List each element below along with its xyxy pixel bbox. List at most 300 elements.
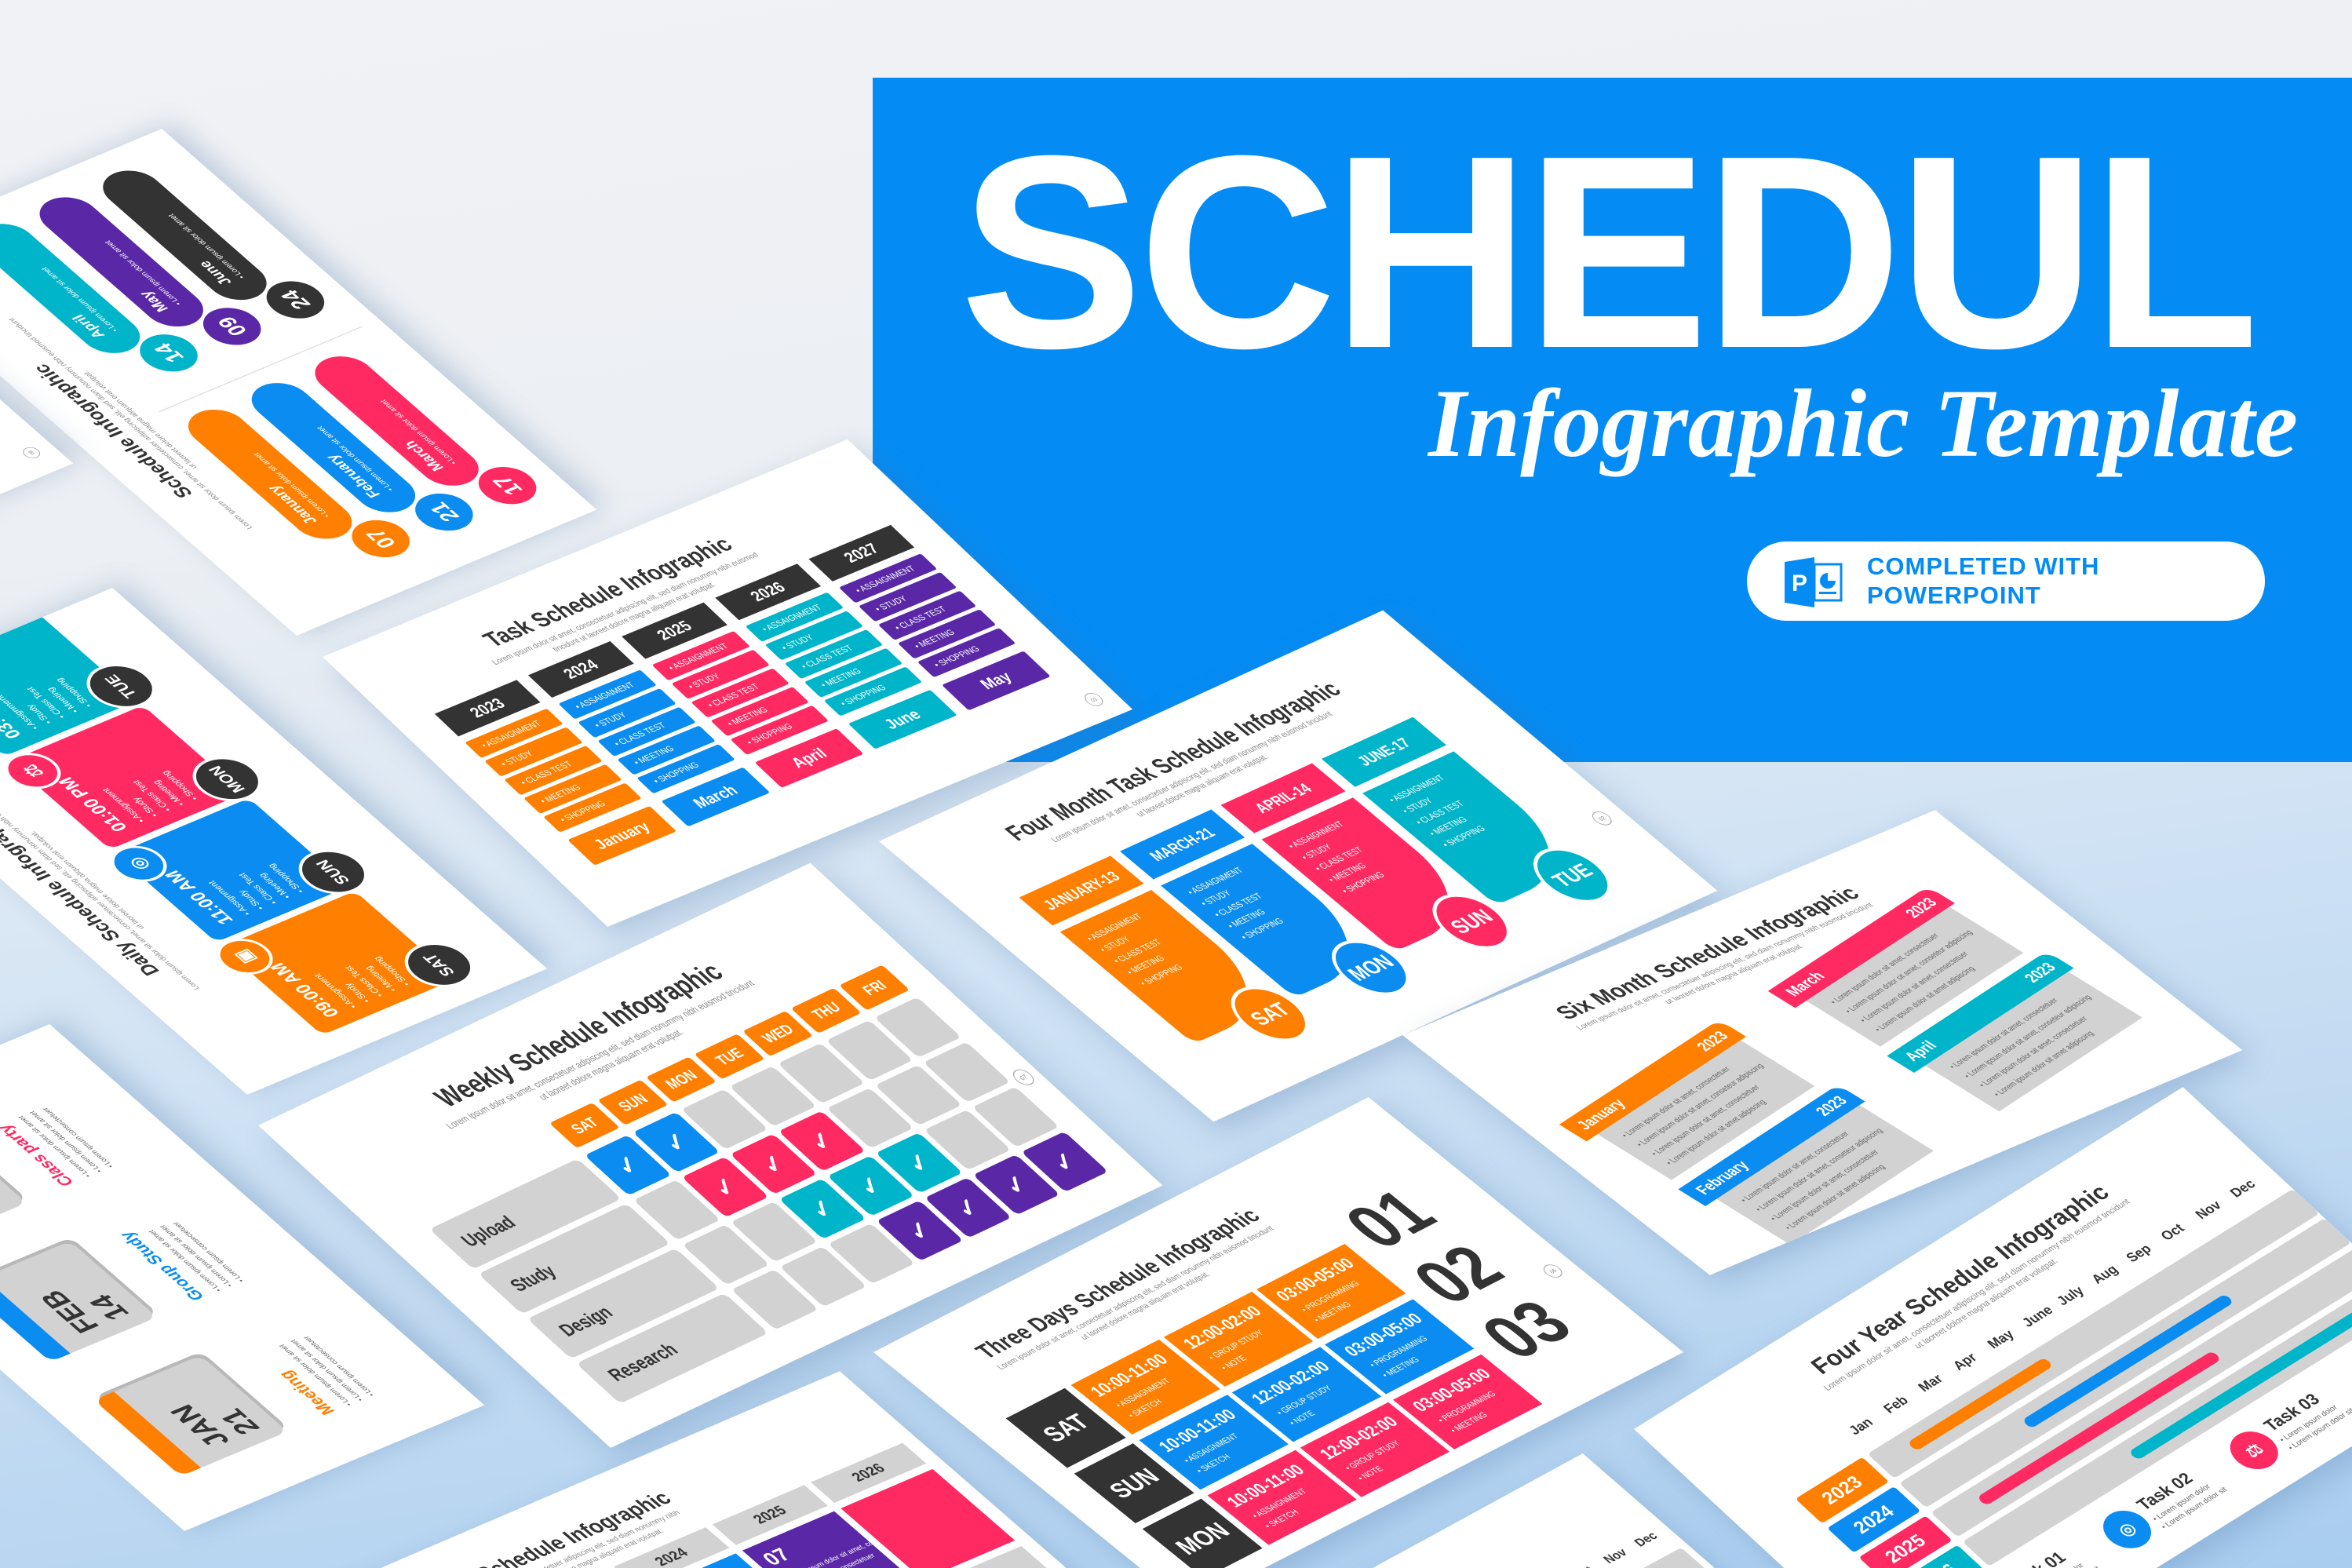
blue header panel xyxy=(873,78,2352,762)
column 2025: • MEETING xyxy=(724,705,770,728)
pill May xyxy=(39,197,261,345)
event Group Study: 14 xyxy=(82,1291,136,1325)
big numbers: 02 xyxy=(1395,1232,1521,1316)
column 2026: • CLASS TEST xyxy=(798,643,855,671)
pill June: June xyxy=(195,259,235,287)
pill January: 07 xyxy=(360,526,401,552)
column 2024: • STUDY xyxy=(592,710,629,730)
row labels: Research xyxy=(603,1340,683,1385)
column 2023: January xyxy=(590,819,654,852)
column April: • ASSAIGNMENT xyxy=(1285,819,1346,851)
pill February xyxy=(251,383,473,531)
day headers xyxy=(551,965,908,1147)
year columns xyxy=(614,1440,1099,1568)
ribbon March: 2023 xyxy=(1902,895,1941,921)
ribbon January: • Lorem ipsum dolor sit amet adipiscing xyxy=(1664,1098,1768,1166)
check grid: ✓ xyxy=(899,1147,939,1178)
pill March xyxy=(315,356,537,504)
event Meeting: Meeting xyxy=(274,1369,338,1417)
divider xyxy=(159,326,363,412)
icon: powerpoint xyxy=(1785,557,1843,607)
row SAT: • PROGRAMMING xyxy=(1299,1279,1362,1314)
column March: • STUDY xyxy=(1198,888,1234,908)
card SUN: ◎ xyxy=(123,855,154,873)
page number xyxy=(1540,1262,1566,1280)
row SAT: • GROUP STUDY xyxy=(1206,1329,1266,1362)
card SUN: • Study xyxy=(236,889,266,911)
title: Six Month Schedule Infographic xyxy=(1549,882,1865,1023)
column 2025 xyxy=(622,603,862,788)
check grid: ✓ xyxy=(753,1149,793,1179)
event Class party: • Lorem ipsum dolor sit amet xyxy=(16,1114,93,1178)
subtitle: Lorem ipsum dolor sit amet, consectetuer adipiscing elit, sed diam nonummy nibh euismod tincidunt ut laoreet dolore magna aliquam erat volutpat. xyxy=(1821,1197,2132,1393)
task legend: Task 03 xyxy=(2259,1391,2324,1435)
column 2026: • ASSAIGNMENT xyxy=(759,603,824,633)
card MON: • Shopping xyxy=(159,770,200,801)
row SAT: 12:00-02:00 xyxy=(1179,1302,1266,1352)
column January: • SHOPPING xyxy=(1138,963,1185,988)
column 2026: • MEETING xyxy=(818,666,863,689)
month header: July xyxy=(2053,1283,2088,1308)
event Meeting: 21 xyxy=(213,1405,266,1439)
ribbon March xyxy=(1767,890,2023,1047)
card TUE: • Meeting xyxy=(45,686,81,714)
title: Four Year Schedule Infographic xyxy=(1805,1180,2115,1379)
column June: • SHOPPING xyxy=(1440,824,1488,849)
card SUN: • Shopping xyxy=(265,862,306,894)
card MON: • Study xyxy=(130,796,160,818)
title: Three Days Schedule Infographic xyxy=(969,1204,1266,1363)
page number: 01 xyxy=(1088,696,1099,703)
gantt rows xyxy=(1796,1189,2352,1568)
ribbon April: • Lorem ipsum dolor sit amet, consectetuer xyxy=(1977,1015,2090,1088)
row SUN: • SKETCH xyxy=(1194,1453,1233,1475)
gantt rows: 2025 xyxy=(1880,1530,1931,1566)
subtitle: Lorem ipsum dolor sit amet, consectetuer adipiscing elit, sed diam nonummy nibh euismod tincidunt ut laoreet dolore magna aliquam erat volutpat. xyxy=(490,551,760,666)
column 2025: 2025 xyxy=(653,618,696,644)
check grid: ✓ xyxy=(1044,1147,1085,1176)
column 2023: • STUDY xyxy=(498,749,535,768)
column 2024: • MEETING xyxy=(631,744,676,767)
card MON: • Assignment xyxy=(100,786,147,824)
ribbon February: 2023 xyxy=(1811,1093,1851,1118)
row MON: 12:00-02:00 xyxy=(1315,1413,1402,1463)
column January: SAT xyxy=(1245,998,1296,1030)
column 2025: • STUDY xyxy=(685,671,722,691)
gantt rows: 2024 xyxy=(1849,1501,1898,1537)
task legend: ◎ xyxy=(2114,1519,2140,1540)
column March: • CLASS TEST xyxy=(1212,892,1265,919)
card TUE: • Class Test xyxy=(24,686,67,720)
column 2025: • CLASS TEST xyxy=(705,682,761,709)
card MON xyxy=(8,708,258,847)
column June: • MEETING xyxy=(1427,815,1470,838)
column March: • MEETING xyxy=(1225,907,1268,930)
ribbon March: • Lorem ipsum dolor sit amet, conseteur adipiscing xyxy=(1843,928,1975,1015)
column June: TUE xyxy=(1546,859,1599,892)
row SAT xyxy=(1006,1244,1406,1468)
ribbon March: • Lorem ipsum dolor sit amet adipiscing xyxy=(1872,965,1977,1033)
row SAT: • NOTE xyxy=(1219,1354,1249,1372)
event Meeting xyxy=(99,1335,376,1474)
card TUE: • Shopping xyxy=(53,676,94,709)
title: Task Schedule Infographic xyxy=(477,532,738,651)
check grid: ✓ xyxy=(899,1216,940,1245)
pill February: • Lorem ipsum dolor sit amet xyxy=(315,425,395,492)
slide: monthly timeline (partial, bottom) xyxy=(1088,1453,1868,1568)
pill May: 09 xyxy=(212,314,252,339)
card MON: • Meeting xyxy=(151,779,187,807)
subtitle: Lorem ipsum dolor sit amet, consectetuer adipiscing elit, sed diam nonummy nibh euismod tincidunt ut laoreet dolore magna aliquam erat volutpat. xyxy=(1048,709,1335,844)
badge: completed with powerpoint xyxy=(1747,542,2265,621)
check grid: ✓ xyxy=(801,1125,842,1156)
event Class party: • Lorem ipsum dolor sit amet xyxy=(27,1110,104,1173)
check grid: ✓ xyxy=(607,1150,648,1180)
card SAT: SAT xyxy=(419,951,458,979)
event Class party: • Lorem ipsum consectetuer xyxy=(41,1107,115,1169)
column 2024: • ASSAIGNMENT xyxy=(572,680,636,711)
row SAT: SAT xyxy=(1037,1409,1096,1447)
ribbon February: • Lorem ipsum dolor sit amet adipiscing xyxy=(1783,1163,1887,1231)
ribbon April: 2023 xyxy=(2020,960,2060,985)
month header xyxy=(1291,1522,1678,1568)
column 2023: • MEETING xyxy=(538,782,583,805)
column 2024: • CLASS TEST xyxy=(611,720,668,748)
month header xyxy=(1845,1165,2281,1442)
row MON: • ASSAIGNMENT xyxy=(1250,1487,1309,1520)
column March: • SHOPPING xyxy=(1238,917,1286,942)
day headers: THU xyxy=(808,998,844,1023)
column January: • STUDY xyxy=(1097,935,1132,954)
check grid: ✓ xyxy=(996,1169,1037,1200)
column 2027: • ASSAIGNMENT xyxy=(853,563,917,595)
column April: SUN xyxy=(1445,905,1499,938)
column 2027: • MEETING xyxy=(912,628,957,651)
ribbon February: • Lorem ipsum dolor sit amet, conseteur adipiscing xyxy=(1753,1127,1885,1213)
row MON: • MEETING xyxy=(1448,1410,1490,1435)
column 2027: • STUDY xyxy=(873,594,910,614)
big numbers: 03 xyxy=(1464,1288,1589,1372)
ribbon January: 2023 xyxy=(1693,1028,1732,1054)
pill February: 21 xyxy=(424,499,465,525)
page number: 02 xyxy=(1596,815,1607,822)
pill April: 14 xyxy=(148,341,189,366)
column April: APRIL-14 xyxy=(1250,780,1316,816)
ribbon January: • Lorem ipsum dolor sit amet, consectetuer xyxy=(1649,1084,1762,1158)
row SUN: 03:00-05:00 xyxy=(1340,1310,1427,1359)
ribbon February xyxy=(1678,1088,1934,1243)
column April: • MEETING xyxy=(1326,861,1369,884)
column June xyxy=(1322,717,1607,903)
column 2024: • SHOPPING xyxy=(651,760,702,786)
big numbers: 01 xyxy=(1327,1177,1453,1261)
subtitle: Lorem ipsum dolor sit amet, consectetuer adipiscing elit, sed diam nonummy nibh euismod tincidunt ut laoreet dolore magna aliquam erat volutpat. xyxy=(7,317,254,531)
big numbers xyxy=(1326,1159,1647,1391)
month header: Nov xyxy=(2192,1198,2225,1222)
ribbon January: • Lorem ipsum dolor sit amet, consectetuer xyxy=(1620,1065,1733,1139)
event Meeting: • Lorem ipsum dolor sit amet xyxy=(289,1339,365,1402)
column April: • SHOPPING xyxy=(1340,870,1387,895)
row labels: Study xyxy=(505,1261,560,1295)
month header: Jan xyxy=(1845,1415,1876,1438)
ribbon April: • Lorem ipsum dolor sit amet, conseteur adipiscing xyxy=(1962,994,2094,1080)
title: Schedule Infographic xyxy=(28,362,198,501)
column June: • ASSAIGNMENT xyxy=(1387,773,1447,804)
ribbon March: • Lorem ipsum dolor sit amet, consectetuer xyxy=(1828,932,1941,1005)
column June: JUNE-17 xyxy=(1353,735,1415,769)
pill June: • Lorem ipsum dolor sit amet xyxy=(166,213,246,279)
pill January: • Lorem ipsum dolor sit amet xyxy=(252,452,332,519)
ribbon April: • Lorem ipsum dolor sit amet adipiscing xyxy=(1992,1030,2096,1098)
card SUN: SUN xyxy=(312,858,354,887)
column March: MARCH-21 xyxy=(1145,825,1219,864)
ribbon February: February xyxy=(1692,1158,1753,1198)
task legend: Task 02 xyxy=(2133,1469,2197,1514)
column 2026: • SHOPPING xyxy=(837,683,888,708)
column April xyxy=(1221,763,1507,948)
check grid: ✓ xyxy=(656,1127,697,1158)
month header: Sep xyxy=(2123,1242,2154,1265)
pill March: 17 xyxy=(487,473,527,498)
event Group Study: • Lorem ipsum dolor sit amet xyxy=(159,1224,235,1288)
event Group Study xyxy=(0,1221,246,1359)
row MON: • NOTE xyxy=(1355,1464,1385,1482)
card SUN: 11:00 AM xyxy=(160,868,238,927)
icon: powerpoint: P xyxy=(1792,571,1807,596)
pill January: January xyxy=(264,483,320,526)
card SAT xyxy=(220,893,471,1033)
row MON: MON xyxy=(1169,1518,1236,1559)
column March: • ASSAIGNMENT xyxy=(1185,866,1245,897)
pill April: • Lorem ipsum dolor sit amet xyxy=(39,266,120,333)
ribbon March: • Lorem ipsum dolor sit amet, consectetuer xyxy=(1858,950,1971,1024)
slide: task schedule xyxy=(323,439,1132,927)
script subtitle: Infographic Template xyxy=(1428,370,2298,477)
check grid xyxy=(587,998,1106,1329)
row labels xyxy=(432,1160,766,1402)
slide: four month task schedule xyxy=(879,611,1717,1121)
day headers: SUN xyxy=(614,1090,651,1114)
slide: partial slide (rotated) xyxy=(0,82,73,589)
task legend: • Lorem ipsum dolor xyxy=(2277,1403,2339,1443)
row SAT: • ASSAIGNMENT xyxy=(1114,1377,1172,1409)
task legend: • Lorem ipsum dolor xyxy=(2150,1482,2212,1522)
row MON: • GROUP STUDY xyxy=(1343,1439,1402,1472)
column 2027: • CLASS TEST xyxy=(892,604,949,632)
column 2027: • SHOPPING xyxy=(932,644,982,669)
day headers: WED xyxy=(757,1021,797,1046)
column 2025: • SHOPPING xyxy=(744,721,795,746)
column January: • CLASS TEST xyxy=(1111,938,1164,965)
month header: May xyxy=(1984,1327,2017,1351)
row SUN: • NOTE xyxy=(1287,1409,1317,1427)
card TUE xyxy=(0,617,152,754)
slide: four year schedule xyxy=(1634,1087,2352,1568)
column 2024: 2024 xyxy=(560,657,603,682)
day headers: FRI xyxy=(859,977,890,998)
card SAT: • Study xyxy=(342,982,372,1004)
ribbon April xyxy=(1887,954,2142,1111)
pill June: 24 xyxy=(275,287,315,312)
column January: JANUARY-13 xyxy=(1038,868,1124,913)
subtitle: Lorem ipsum dolor sit amet, consectetuer adipiscing elit, sed diam nonummy nibh euismod tincidunt ut laoreet dolore magna aliquam erat volutpat. xyxy=(1574,902,1876,1031)
event Meeting: JAN xyxy=(163,1401,236,1451)
row SUN: • PROGRAMMING xyxy=(1367,1334,1430,1369)
pill January xyxy=(188,410,410,557)
month header: Feb xyxy=(1880,1393,1912,1416)
event Meeting: • Lorem ipsum dolor sit amet xyxy=(277,1344,354,1407)
pill April: April xyxy=(69,312,108,341)
column January xyxy=(1019,855,1305,1041)
row SUN: 10:00-11:00 xyxy=(1154,1406,1241,1455)
column 2027 xyxy=(808,524,1050,709)
column January: • MEETING xyxy=(1125,954,1167,976)
card TUE: • Study xyxy=(24,703,54,725)
column 2026: • STUDY xyxy=(779,633,815,652)
page number: 06 xyxy=(1548,1267,1558,1274)
event Group Study: • Lorem ipsum dolor sit amet xyxy=(147,1229,223,1293)
month header: Nov xyxy=(1600,1546,1630,1566)
card SAT: • Assignment xyxy=(312,972,359,1009)
row MON: • PROGRAMMING xyxy=(1435,1390,1498,1424)
column April: • CLASS TEST xyxy=(1312,845,1366,873)
subtitle: Lorem ipsum dolor sit amet, consectetuer adipiscing elit, sed diam nonummy nibh euismod tincidunt ut laoreet dolore magna aliquam erat volutpat. xyxy=(995,1224,1276,1371)
column 2027: 2027 xyxy=(840,541,883,566)
column June: • CLASS TEST xyxy=(1413,799,1466,826)
column 2023: • SHOPPING xyxy=(557,799,607,824)
month header: Aug xyxy=(2088,1262,2121,1286)
card MON: 01:00 PM xyxy=(54,775,132,834)
row SUN: 12:00-02:00 xyxy=(1247,1358,1334,1407)
row MON: 10:00-11:00 xyxy=(1222,1461,1309,1511)
day headers: SAT xyxy=(567,1114,602,1136)
column 2026: 2026 xyxy=(746,579,789,604)
row SAT: • SKETCH xyxy=(1126,1398,1165,1420)
pill March: • Lorem ipsum dolor sit amet xyxy=(378,399,458,465)
day headers: TUE xyxy=(711,1045,747,1068)
badge text: POWERPOINT xyxy=(1867,582,2041,609)
column 2026: June xyxy=(881,706,924,732)
big title SCHEDUL: SCHEDUL xyxy=(960,99,2255,406)
pill March: March xyxy=(400,439,447,473)
year columns: 2026 xyxy=(848,1461,889,1485)
ribbon April: • Lorem ipsum dolor sit amet, consectetuer xyxy=(1947,997,2060,1070)
row SUN: SUN xyxy=(1103,1464,1165,1503)
row SAT: • MEETING xyxy=(1311,1300,1353,1324)
row labels: Upload xyxy=(456,1212,520,1250)
card SAT: • Shopping xyxy=(372,955,412,987)
pill May: May xyxy=(136,289,172,314)
row MON: • SKETCH xyxy=(1263,1508,1301,1530)
task legend: ⚖ xyxy=(2241,1440,2267,1461)
card SUN xyxy=(115,800,364,940)
check grid: ✓ xyxy=(802,1194,843,1223)
column 2023 xyxy=(435,680,676,865)
row SUN: • MEETING xyxy=(1380,1355,1421,1379)
card TUE: TUE xyxy=(100,673,141,700)
event Group Study: FEB xyxy=(33,1286,106,1337)
event Meeting: • Lorem ipsum consectetuer xyxy=(301,1335,376,1397)
slide: yearly schedule (partial, bottom) xyxy=(315,1371,1125,1568)
subtitle: Lorem ipsum dolor sit amet, consectetuer adipiscing elit, sed diam nonummy nibh euismod tincidunt ut laoreet dolore magna aliquam erat volutpat. xyxy=(444,979,757,1131)
card SUN: • Class Test xyxy=(236,872,279,906)
slide: weekly schedule xyxy=(258,863,1162,1448)
column 2023: • CLASS TEST xyxy=(518,760,574,787)
badge text: COMPLETED WITH xyxy=(1867,552,2099,580)
task legend xyxy=(1925,1309,2352,1568)
gantt rows: 2023 xyxy=(1817,1472,1867,1508)
badge text xyxy=(1867,552,2099,610)
slide: three days schedule xyxy=(873,1097,1683,1568)
card MON: MON xyxy=(205,764,249,795)
month header: June xyxy=(2018,1303,2056,1329)
card SAT: 09:00 AM xyxy=(266,961,344,1020)
row MON xyxy=(1143,1355,1543,1568)
column January: • ASSAIGNMENT xyxy=(1084,912,1145,943)
column 2024: March xyxy=(689,782,742,811)
column March xyxy=(1120,809,1406,995)
check grid: ✓ xyxy=(850,1171,891,1201)
ribbon January xyxy=(1559,1023,1814,1180)
ribbon January: • Lorem ipsum dolor sit amet, conseteur adipiscing xyxy=(1634,1062,1766,1148)
column 2024 xyxy=(528,641,769,826)
slide: schedule pills (rotated) xyxy=(0,129,596,636)
page number xyxy=(1081,691,1107,708)
month header: Oct xyxy=(2157,1220,2187,1243)
ribbon March: March xyxy=(1781,968,1829,999)
page number: 08 xyxy=(27,450,36,456)
month header: Apr xyxy=(1949,1350,1980,1373)
card SUN: • Meeting xyxy=(257,872,293,899)
event Group Study: Group Study xyxy=(115,1230,208,1303)
slide: six month schedule xyxy=(1402,810,2242,1275)
column June: • STUDY xyxy=(1400,796,1435,815)
row SUN xyxy=(1074,1299,1474,1523)
slide: daily schedule (rotated) xyxy=(0,588,547,1095)
month header: Dec xyxy=(1631,1529,1661,1549)
card MON: ⚖ xyxy=(17,762,48,780)
row SUN: • GROUP STUDY xyxy=(1274,1384,1334,1417)
page number: 07 xyxy=(1018,1074,1030,1081)
column 2026 xyxy=(715,563,956,749)
card SAT: ▣ xyxy=(229,947,261,966)
row labels: Design xyxy=(554,1302,618,1340)
ribbon January: January xyxy=(1573,1096,1629,1132)
year columns: 2025 xyxy=(749,1503,790,1526)
column 2025: April xyxy=(787,746,831,771)
column 2025: • ASSAIGNMENT xyxy=(665,641,731,673)
ribbon February: • Lorem ipsum dolor sit amet, consectetuer xyxy=(1738,1130,1851,1204)
check grid: ✓ xyxy=(705,1172,746,1202)
page number xyxy=(1588,809,1616,827)
column 2023: • ASSAIGNMENT xyxy=(479,719,543,749)
column April: • STUDY xyxy=(1299,842,1334,862)
pill April xyxy=(0,224,198,372)
card SAT: • Meeting xyxy=(363,965,399,993)
pill June xyxy=(103,171,325,319)
check grid: ✓ xyxy=(947,1192,988,1223)
card SAT: • Class Test xyxy=(342,965,385,998)
page number xyxy=(20,445,44,461)
ribbon April: April xyxy=(1901,1038,1941,1064)
ribbon February: • Lorem ipsum dolor sit amet, consectetuer xyxy=(1768,1148,1881,1222)
column March: MON xyxy=(1342,950,1399,985)
row SAT: 03:00-05:00 xyxy=(1271,1255,1358,1304)
day headers: MON xyxy=(661,1067,701,1092)
month header: Mar xyxy=(1915,1371,1946,1395)
pill May: • Lorem ipsum dolor sit amet xyxy=(103,239,183,306)
month header: Dec xyxy=(2226,1176,2259,1200)
